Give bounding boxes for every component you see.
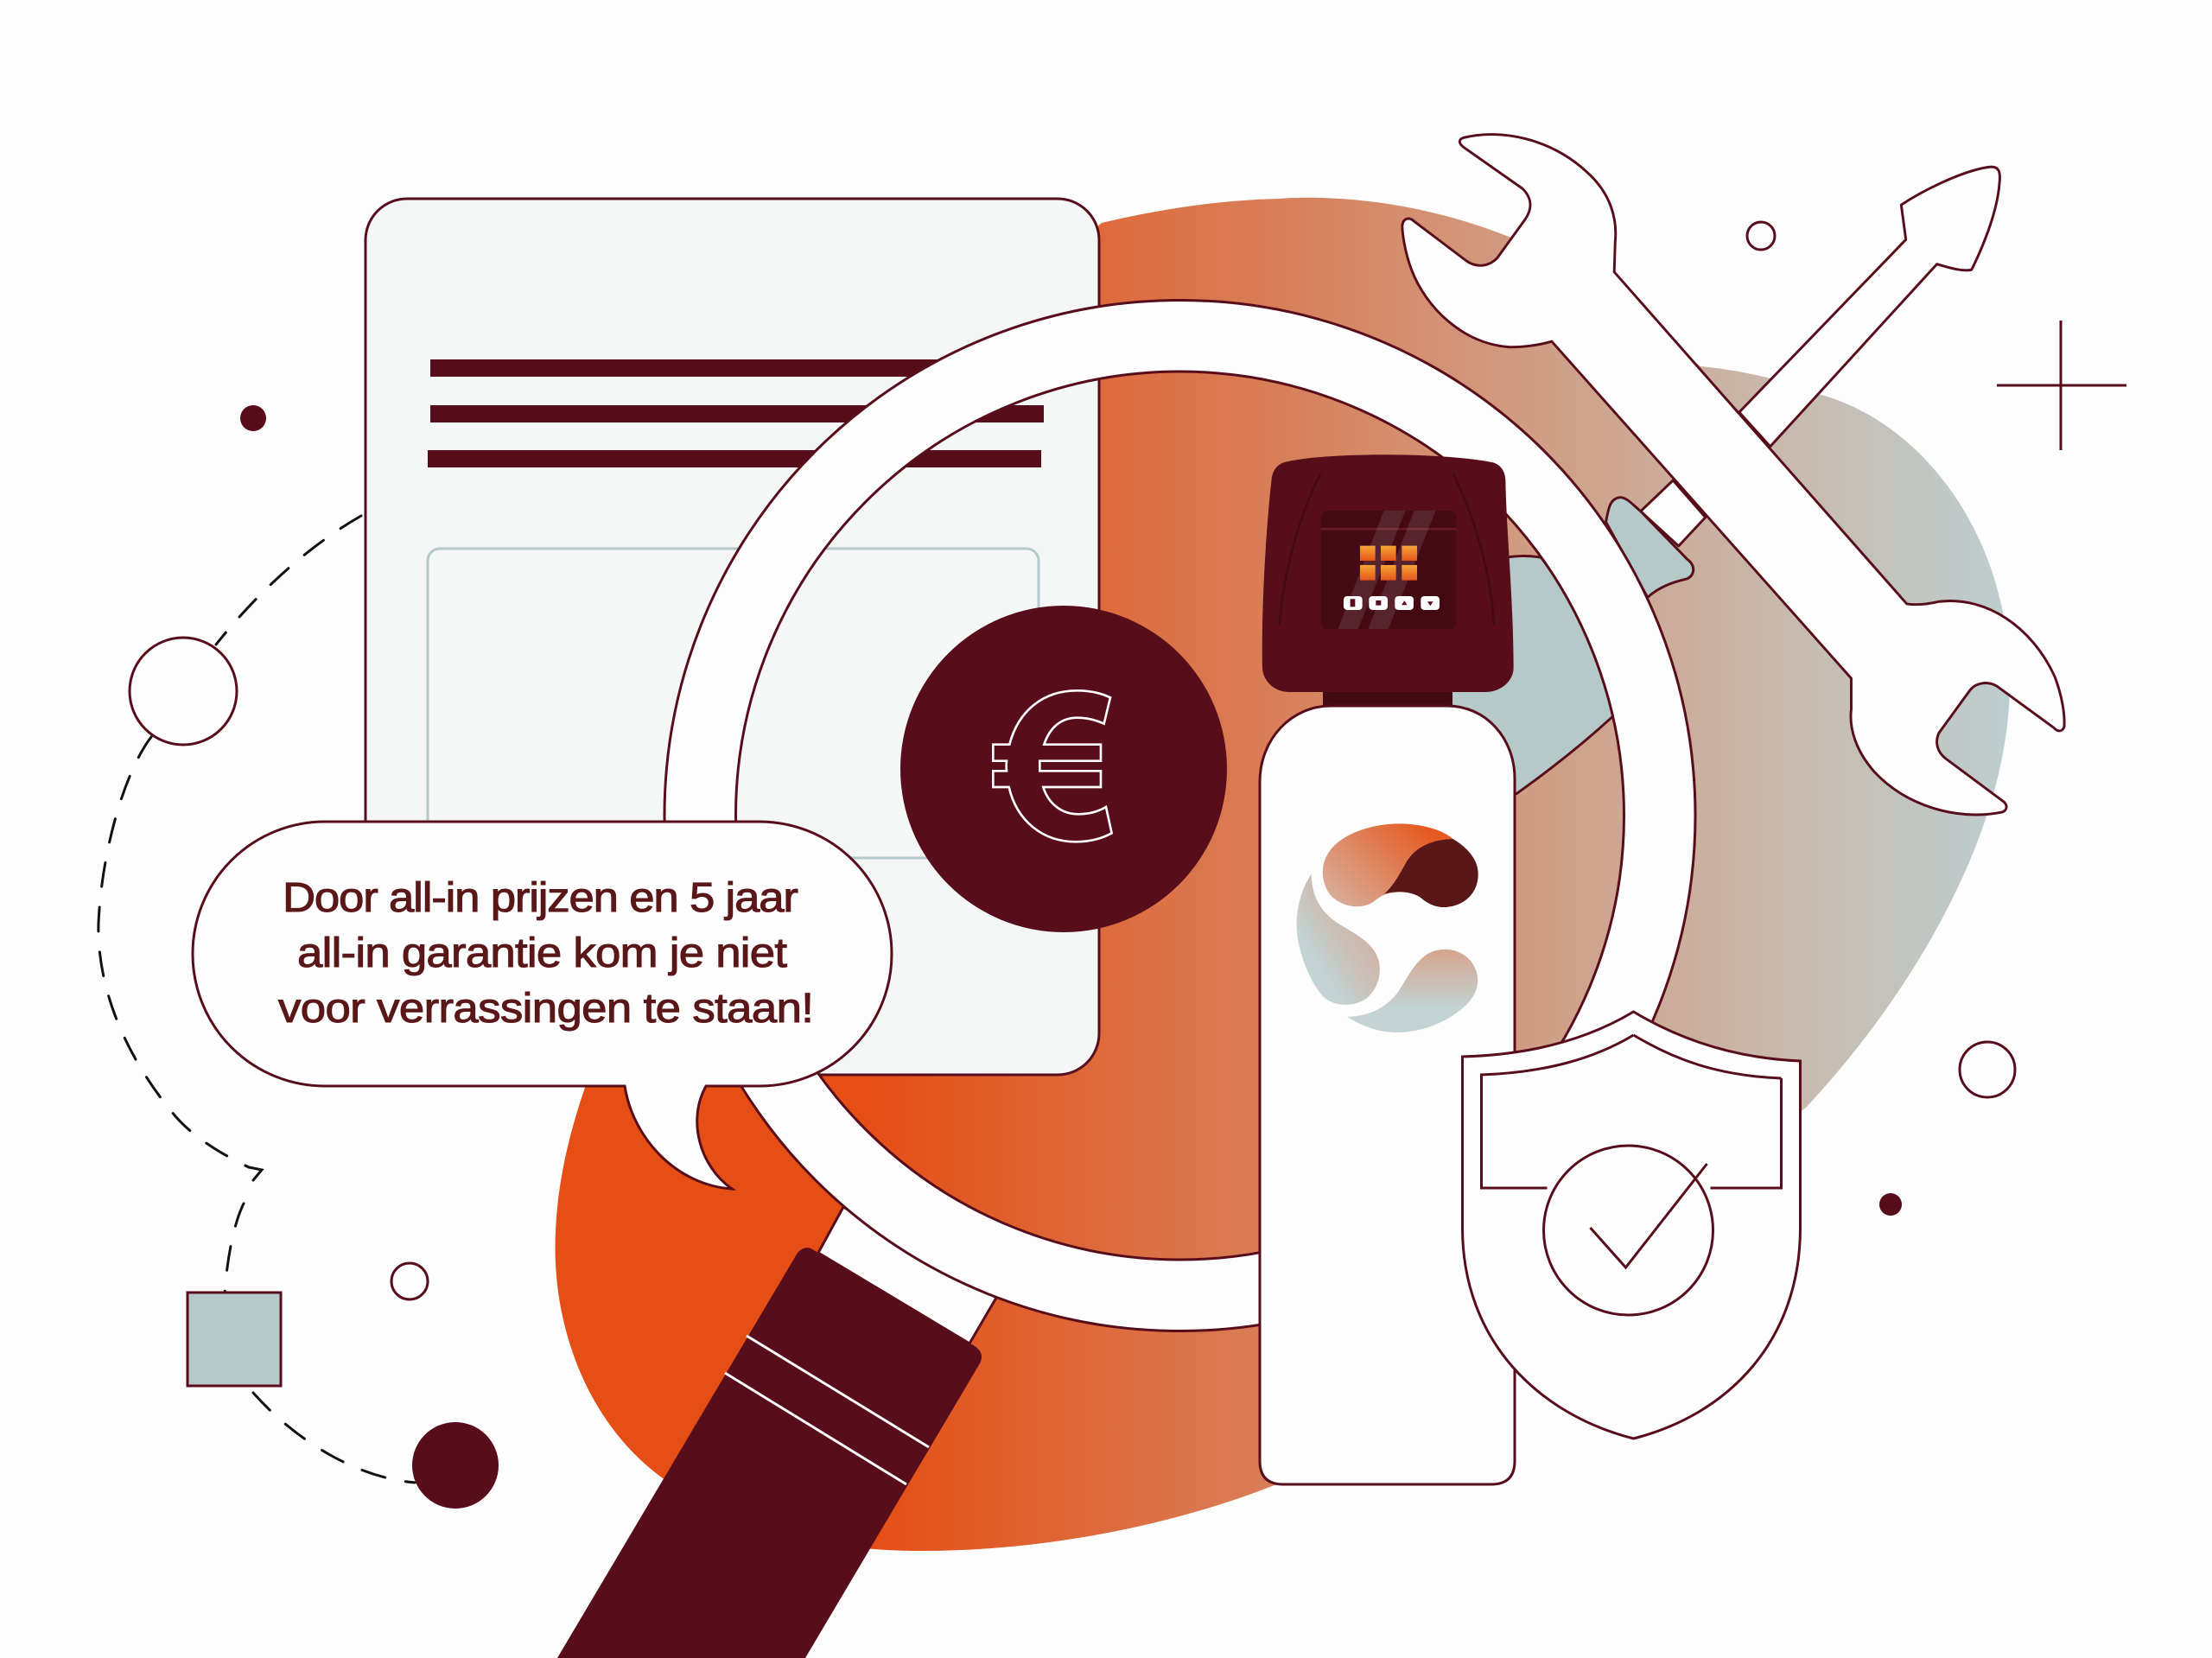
callout text: all-in garantie kom je niet [297, 929, 787, 975]
magnifier [557, 301, 1695, 1658]
second tool: arrow-head driver [1606, 167, 1999, 597]
callout text: Door all-in prijzen en 5 jaar [283, 873, 798, 920]
decorative shapes right [1747, 222, 2126, 1216]
euro coin [900, 606, 1227, 932]
icon: euro sign [993, 690, 1112, 842]
icon: shield with check [1462, 1012, 1801, 1439]
water softener device [1260, 454, 1515, 1484]
blue shape inside lens [1412, 556, 1624, 807]
logo [1297, 823, 1478, 1032]
callout text: voor verrassingen te staan! [278, 984, 814, 1031]
decorative dashed path [99, 516, 415, 1483]
speech bubble [193, 822, 892, 1189]
document panel [365, 199, 1099, 1075]
gradient blob [556, 198, 2010, 1551]
callout text [278, 873, 814, 1031]
device body [1260, 706, 1515, 1484]
icon: wrench [1402, 135, 2064, 815]
decorative shapes left [130, 405, 499, 1509]
device head [1262, 454, 1514, 692]
